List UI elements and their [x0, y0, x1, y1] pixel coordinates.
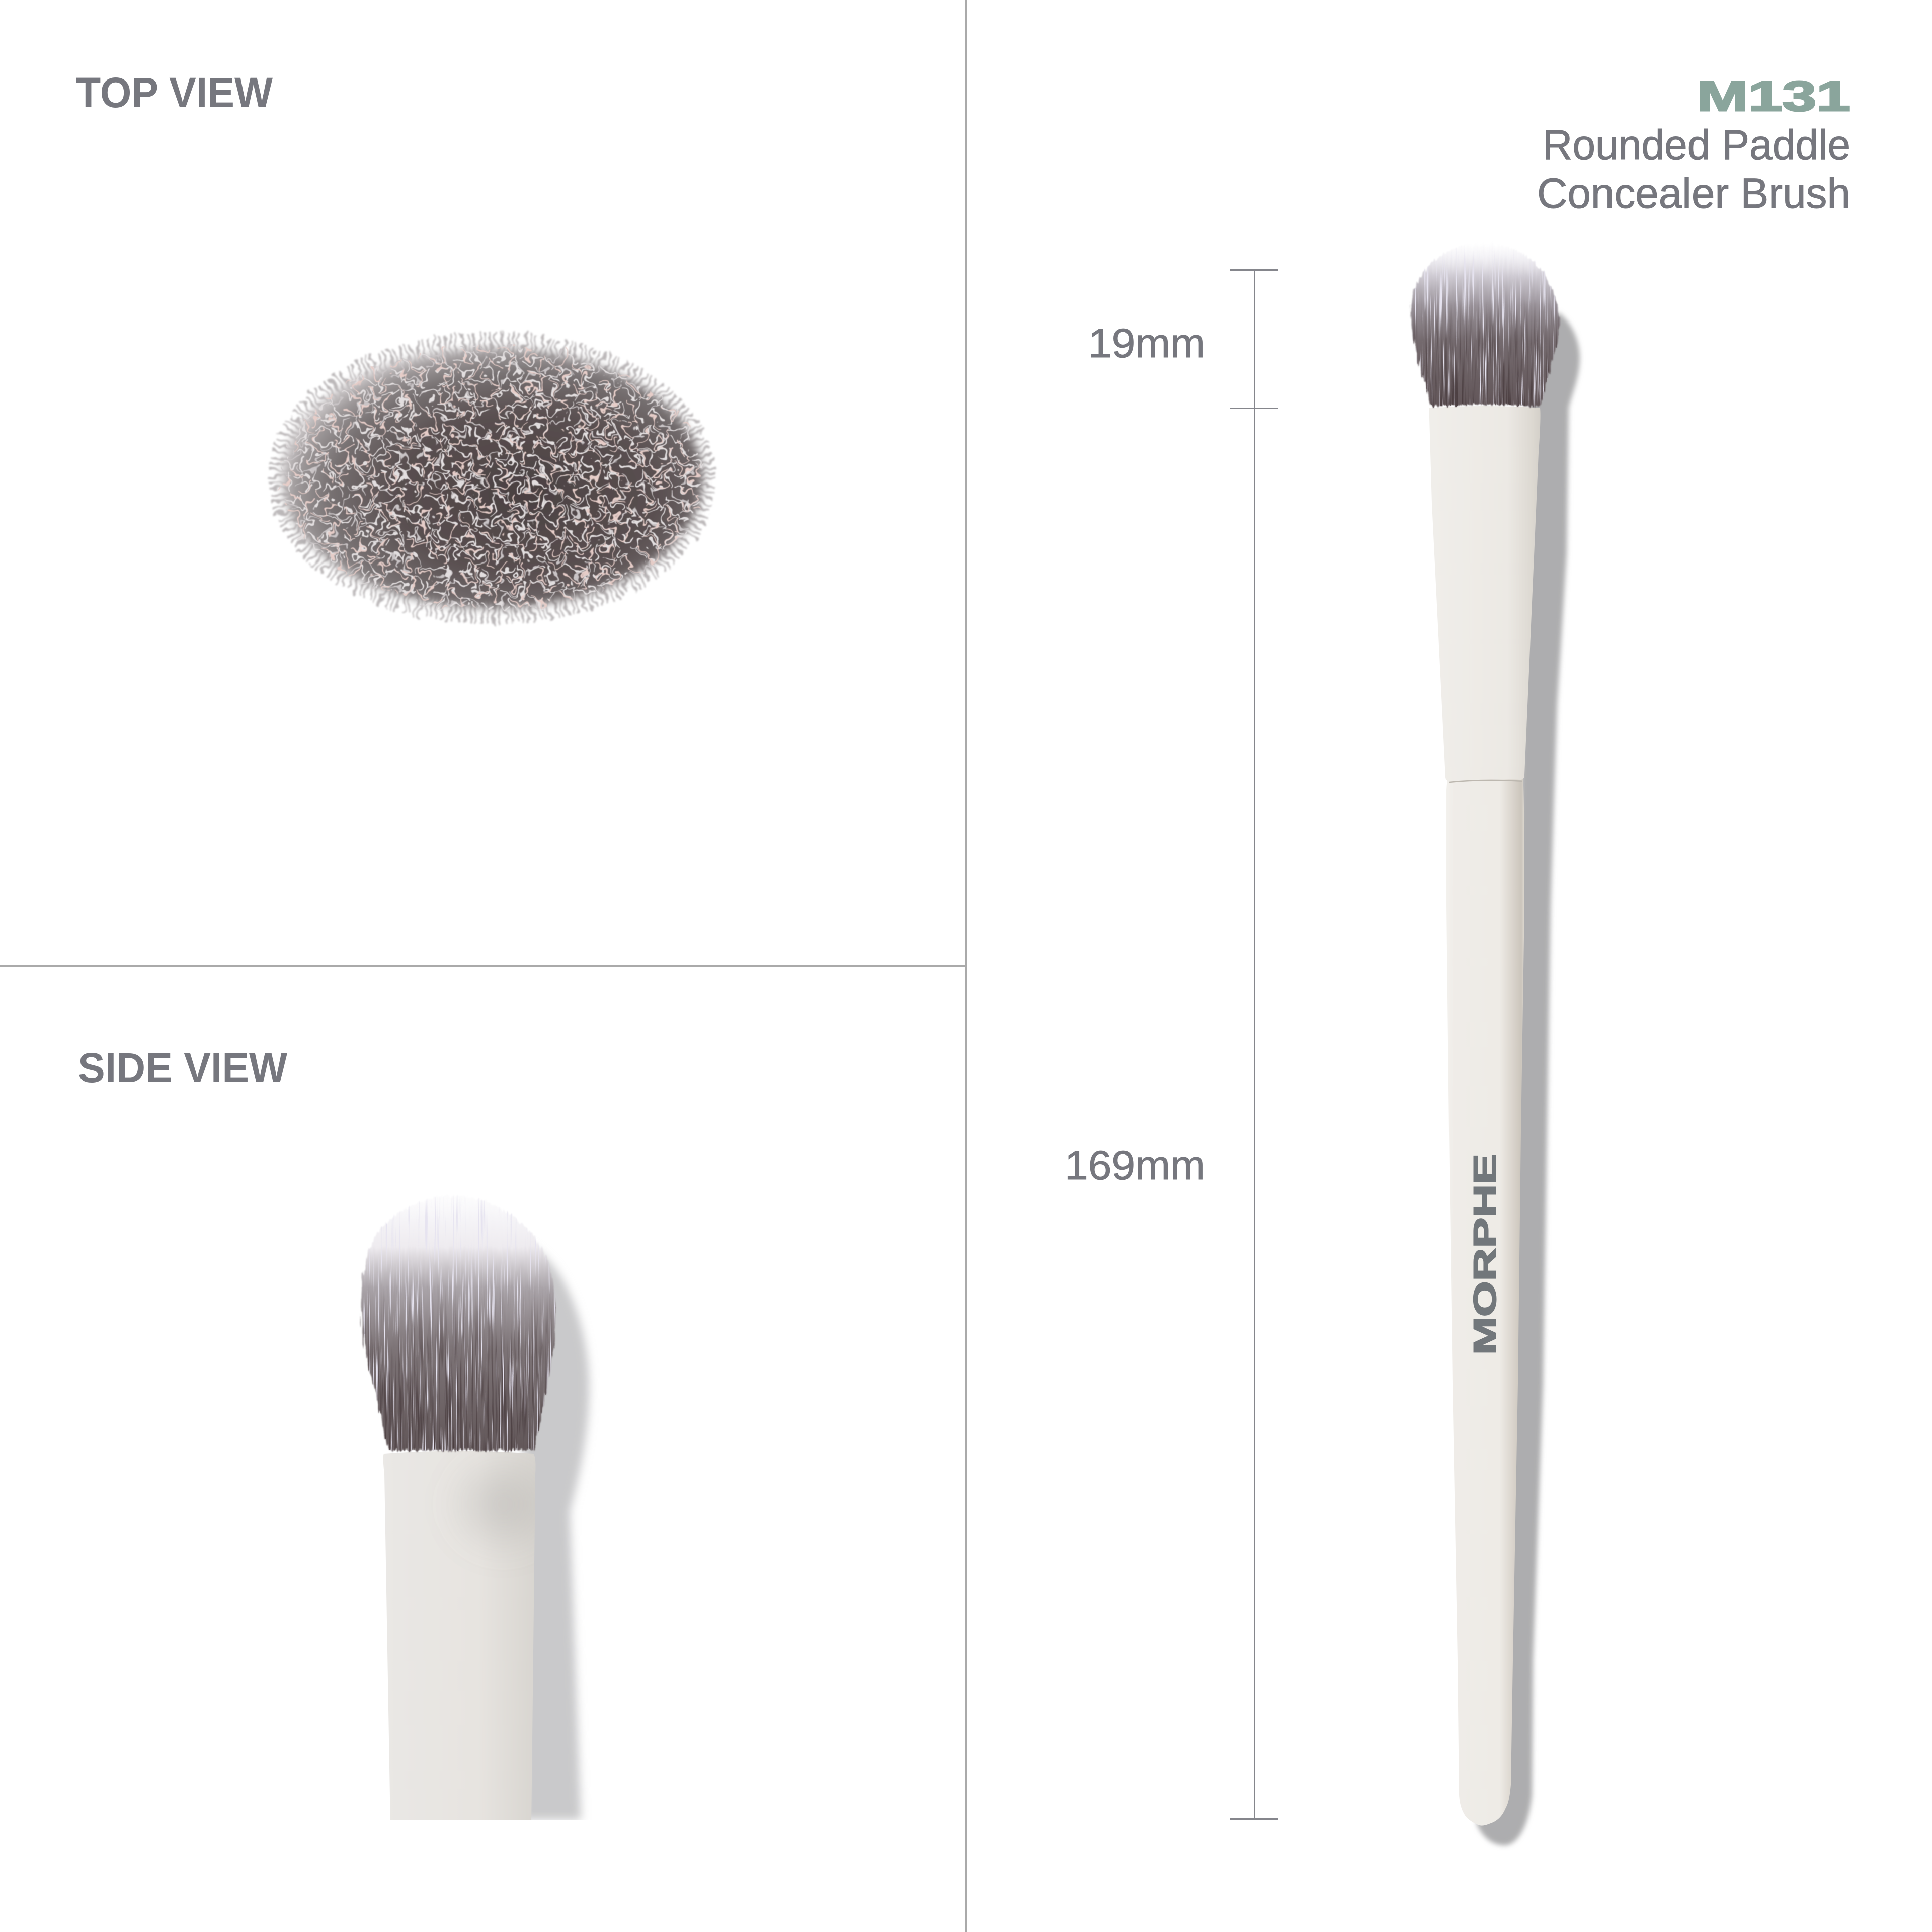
panel: full brush with dimensions	[1065, 72, 1850, 1845]
product title	[1537, 72, 1850, 217]
product name line two: Concealer Brush	[1537, 170, 1850, 217]
cast shadow	[1477, 312, 1580, 1845]
ferrule	[1429, 406, 1541, 781]
model code: M131	[1697, 72, 1850, 120]
product name line one: Rounded Paddle	[1543, 121, 1850, 169]
bristles	[1411, 243, 1560, 407]
panel: top view	[76, 69, 703, 610]
handle	[1446, 777, 1524, 1826]
handle length label: 169mm	[1065, 1143, 1205, 1188]
dimension scale	[1065, 269, 1278, 1820]
heading: side view: SIDE VIEW	[78, 1044, 288, 1091]
bristle length label: 19mm	[1088, 320, 1205, 366]
heading: top view: TOP VIEW	[76, 69, 273, 116]
handle logo: MORPHE	[1468, 1154, 1503, 1355]
brush close-up from the side	[361, 1196, 589, 1826]
full brush	[1411, 243, 1580, 1845]
brush head seen from above	[281, 346, 703, 610]
panel: side view	[78, 1044, 589, 1826]
